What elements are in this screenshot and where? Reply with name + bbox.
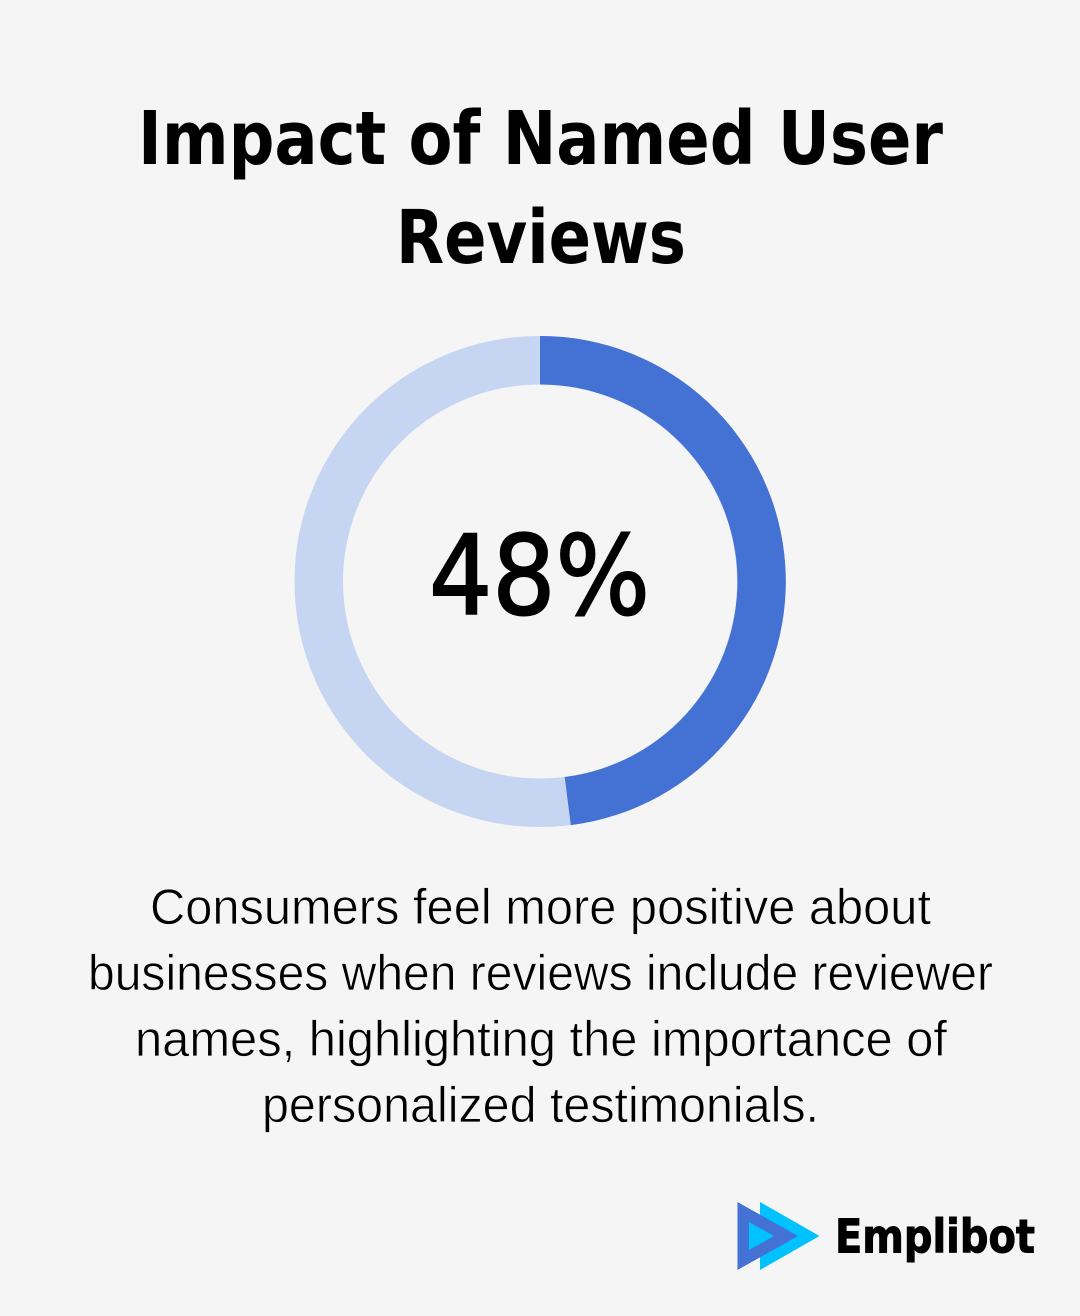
title: Impact of Named User xyxy=(138,96,943,182)
description text: Consumers feel more positive about xyxy=(150,879,931,935)
description text: names, highlighting the importance of xyxy=(135,1011,947,1067)
icon: play triangles xyxy=(738,1202,820,1270)
title: Reviews xyxy=(396,195,686,281)
logo: Emplibot xyxy=(738,1202,1035,1270)
donut value: 48% xyxy=(429,512,650,640)
description text: businesses when reviews include reviewer xyxy=(88,945,993,1001)
description text xyxy=(88,879,993,1133)
donut chart: 48% xyxy=(319,336,786,825)
title xyxy=(138,96,943,281)
logo wordmark: Emplibot xyxy=(835,1210,1035,1264)
description text: personalized testimonials. xyxy=(262,1077,819,1133)
